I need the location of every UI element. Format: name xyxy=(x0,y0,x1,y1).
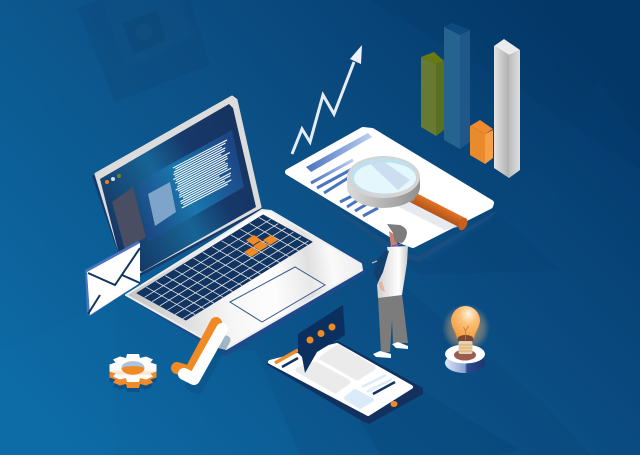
hand xyxy=(378,281,385,292)
envelope icon xyxy=(85,241,140,316)
sidebar xyxy=(112,187,146,250)
bar: orange xyxy=(470,120,493,164)
neck and face xyxy=(389,231,398,247)
arm xyxy=(373,250,389,282)
laptop lid xyxy=(92,95,262,283)
light bulb icon xyxy=(442,304,490,373)
trackpad xyxy=(230,267,325,322)
fingers xyxy=(372,261,377,263)
phone lines xyxy=(275,350,395,394)
phone button xyxy=(390,401,398,407)
trousers xyxy=(378,294,408,353)
handle xyxy=(405,192,469,232)
document lines xyxy=(311,160,378,216)
bar: blue xyxy=(444,23,470,149)
keyboard xyxy=(137,215,312,320)
shoes xyxy=(373,351,391,358)
bulb stand xyxy=(445,344,485,373)
document panel xyxy=(288,130,498,262)
collar xyxy=(392,244,402,246)
person xyxy=(372,224,408,358)
speech bubble xyxy=(298,305,345,373)
window dots xyxy=(105,180,109,184)
magnifying glass xyxy=(347,156,469,232)
document title bar xyxy=(306,133,372,172)
hair xyxy=(387,224,407,243)
laptop xyxy=(92,95,365,356)
rising arrow xyxy=(292,45,362,154)
check mark icon xyxy=(177,323,226,390)
phone panels xyxy=(298,347,373,407)
bar: olive xyxy=(421,52,444,136)
orange keys xyxy=(244,235,278,257)
phone xyxy=(266,341,423,424)
gear icon xyxy=(110,354,156,392)
image placeholder xyxy=(148,182,176,226)
bar: white xyxy=(494,39,520,178)
shadow: laptop and phone xyxy=(218,180,590,455)
screen text lines xyxy=(171,140,236,209)
content panel xyxy=(137,130,244,242)
laptop base xyxy=(125,209,365,356)
vest xyxy=(377,246,408,298)
bar chart xyxy=(421,23,520,178)
